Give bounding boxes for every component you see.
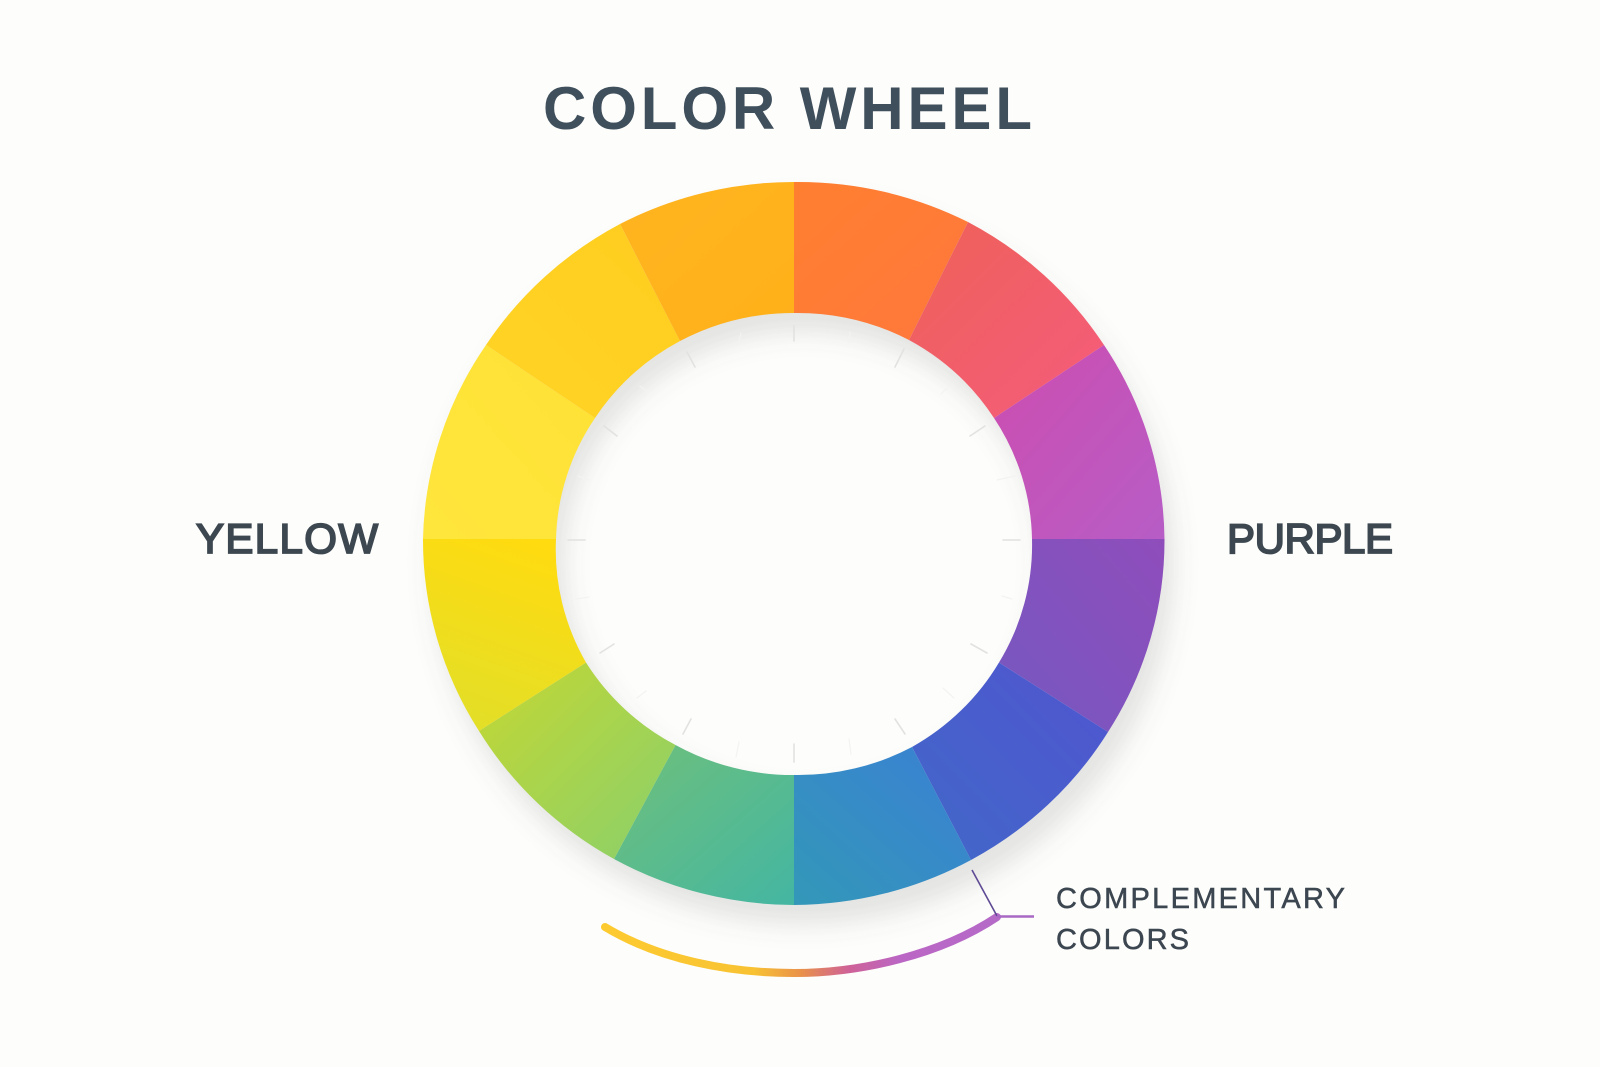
wheel drop shadow bbox=[432, 201, 1174, 925]
callout: complementary colors: COMPLEMENTARY bbox=[1056, 883, 1345, 915]
label: yellow: YELLOW bbox=[196, 515, 378, 562]
segment: blue-violet bbox=[912, 662, 1108, 860]
segment: yellow-green bbox=[423, 539, 586, 731]
leader line to wheel bbox=[972, 870, 997, 916]
title: COLOR WHEEL bbox=[543, 75, 1032, 142]
color wheel bbox=[423, 182, 1174, 925]
segment: purple bbox=[999, 539, 1165, 732]
gradient arc bbox=[605, 917, 997, 973]
inner tick marks bbox=[568, 326, 1020, 762]
segment: blue-green bbox=[614, 745, 794, 905]
segment: green bbox=[479, 662, 676, 859]
segment: yellow-orange bbox=[486, 224, 680, 418]
segment: amber bbox=[620, 182, 794, 341]
label: purple: PURPLE bbox=[1227, 515, 1393, 562]
segment: orange bbox=[794, 182, 968, 340]
segment: yellow bbox=[423, 345, 595, 539]
segment: red-orange bbox=[909, 222, 1104, 418]
segment: blue bbox=[794, 747, 971, 905]
callout: complementary colors: COLORS bbox=[1056, 924, 1189, 956]
complementary colors bracket bbox=[605, 870, 1034, 973]
callout: complementary colors bbox=[1056, 883, 1345, 956]
leader line to label bbox=[997, 915, 1034, 918]
segment: red-violet bbox=[994, 345, 1164, 539]
